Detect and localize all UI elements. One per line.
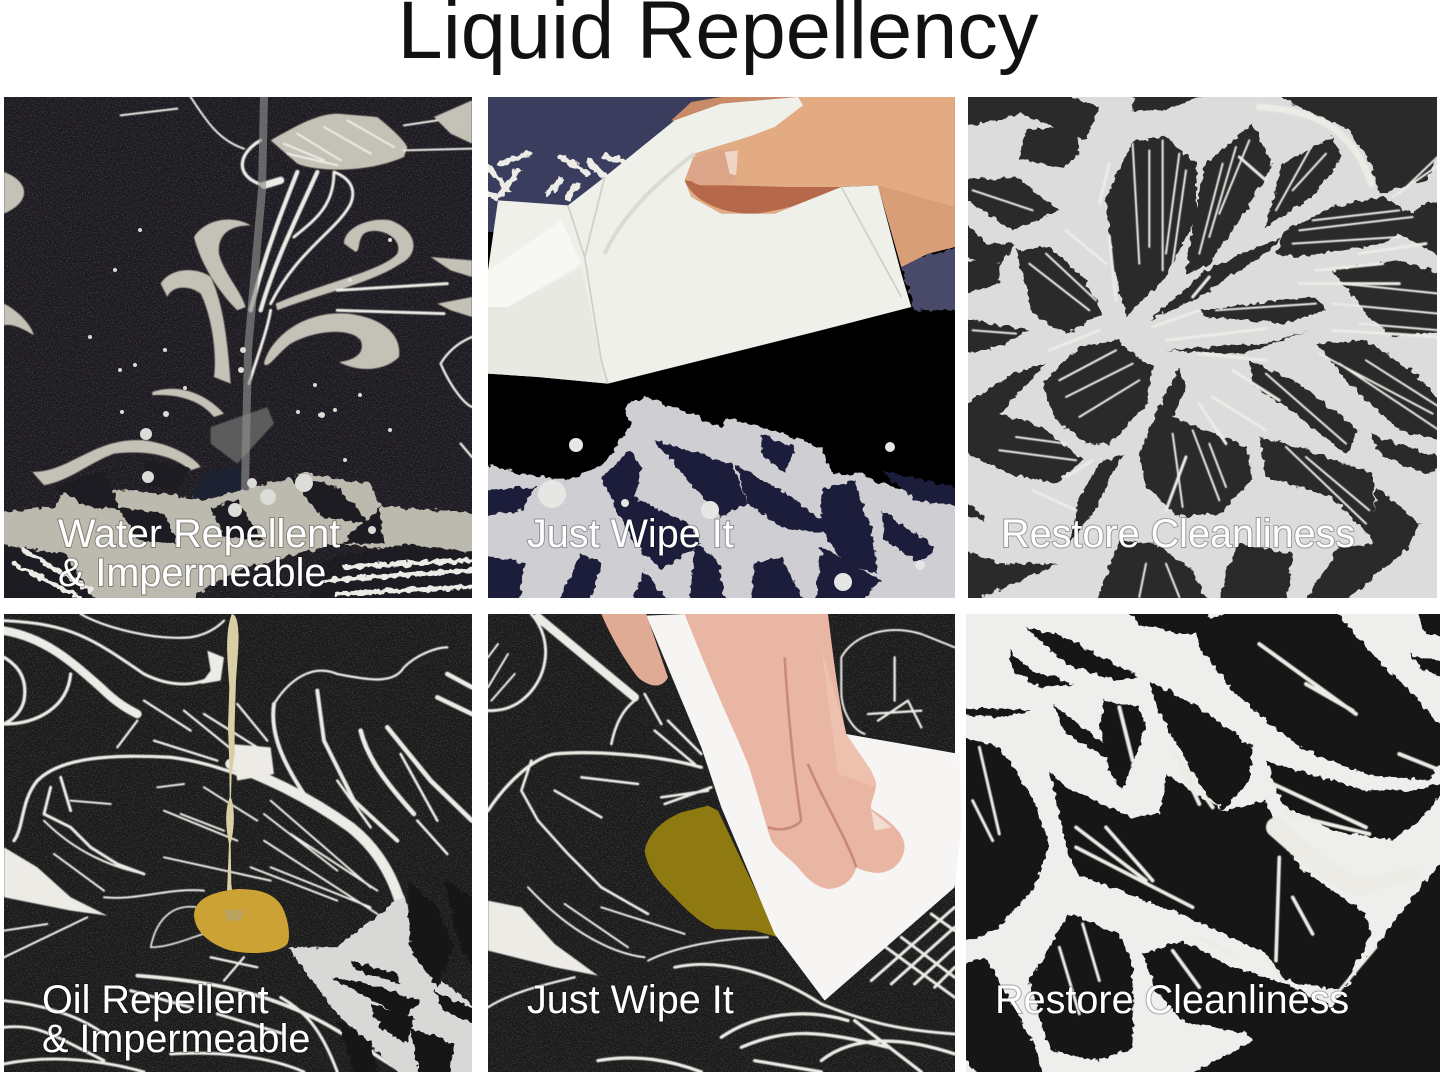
- panel: just wipe water: [475, 97, 968, 610]
- floral lines: [488, 614, 955, 1072]
- caption: Just Wipe It: [527, 978, 734, 1022]
- splashes on navy fabric: [488, 154, 968, 310]
- oil puddle: [645, 806, 778, 937]
- dark streaks in white centre: [1033, 157, 1441, 510]
- caption: Just Wipe It: [527, 512, 734, 556]
- water droplets: [538, 438, 925, 591]
- paper towel: [646, 614, 961, 1001]
- hand: [601, 614, 905, 889]
- caption line 2: & Impermeable: [58, 551, 326, 595]
- water stream: [245, 97, 264, 490]
- white lower-right mass: [287, 881, 484, 1075]
- dark petals: [953, 601, 1445, 1075]
- tissue: [488, 97, 911, 384]
- mushroom shading: [284, 120, 394, 165]
- caption: Restore Cleanliness: [1001, 512, 1355, 556]
- floral lines: [4, 614, 472, 1072]
- panel: restore cleanliness water: [953, 84, 1445, 610]
- panel: oil repellent: [4, 614, 484, 1075]
- hand: [488, 97, 955, 384]
- oil stream: [226, 614, 239, 901]
- caption: Oil Repellent: [42, 978, 269, 1022]
- floral plume on fabric: [4, 97, 472, 500]
- oil puddle: [194, 889, 289, 953]
- caption: Restore Cleanliness: [995, 978, 1349, 1022]
- water droplets: [88, 228, 392, 534]
- flower petals: [953, 84, 1445, 610]
- petal veins: [973, 107, 1441, 597]
- caption: Water Repellent: [58, 512, 340, 556]
- floral bottom: [4, 459, 472, 598]
- panel: water repellent: [0, 97, 487, 610]
- stem base: [211, 407, 274, 464]
- floral fabric bottom: [488, 396, 955, 598]
- panel: just wipe oil: [488, 614, 961, 1072]
- panel: restore cleanliness oil: [953, 601, 1445, 1075]
- caption line 2: & Impermeable: [42, 1017, 310, 1061]
- white veins: [973, 644, 1441, 1014]
